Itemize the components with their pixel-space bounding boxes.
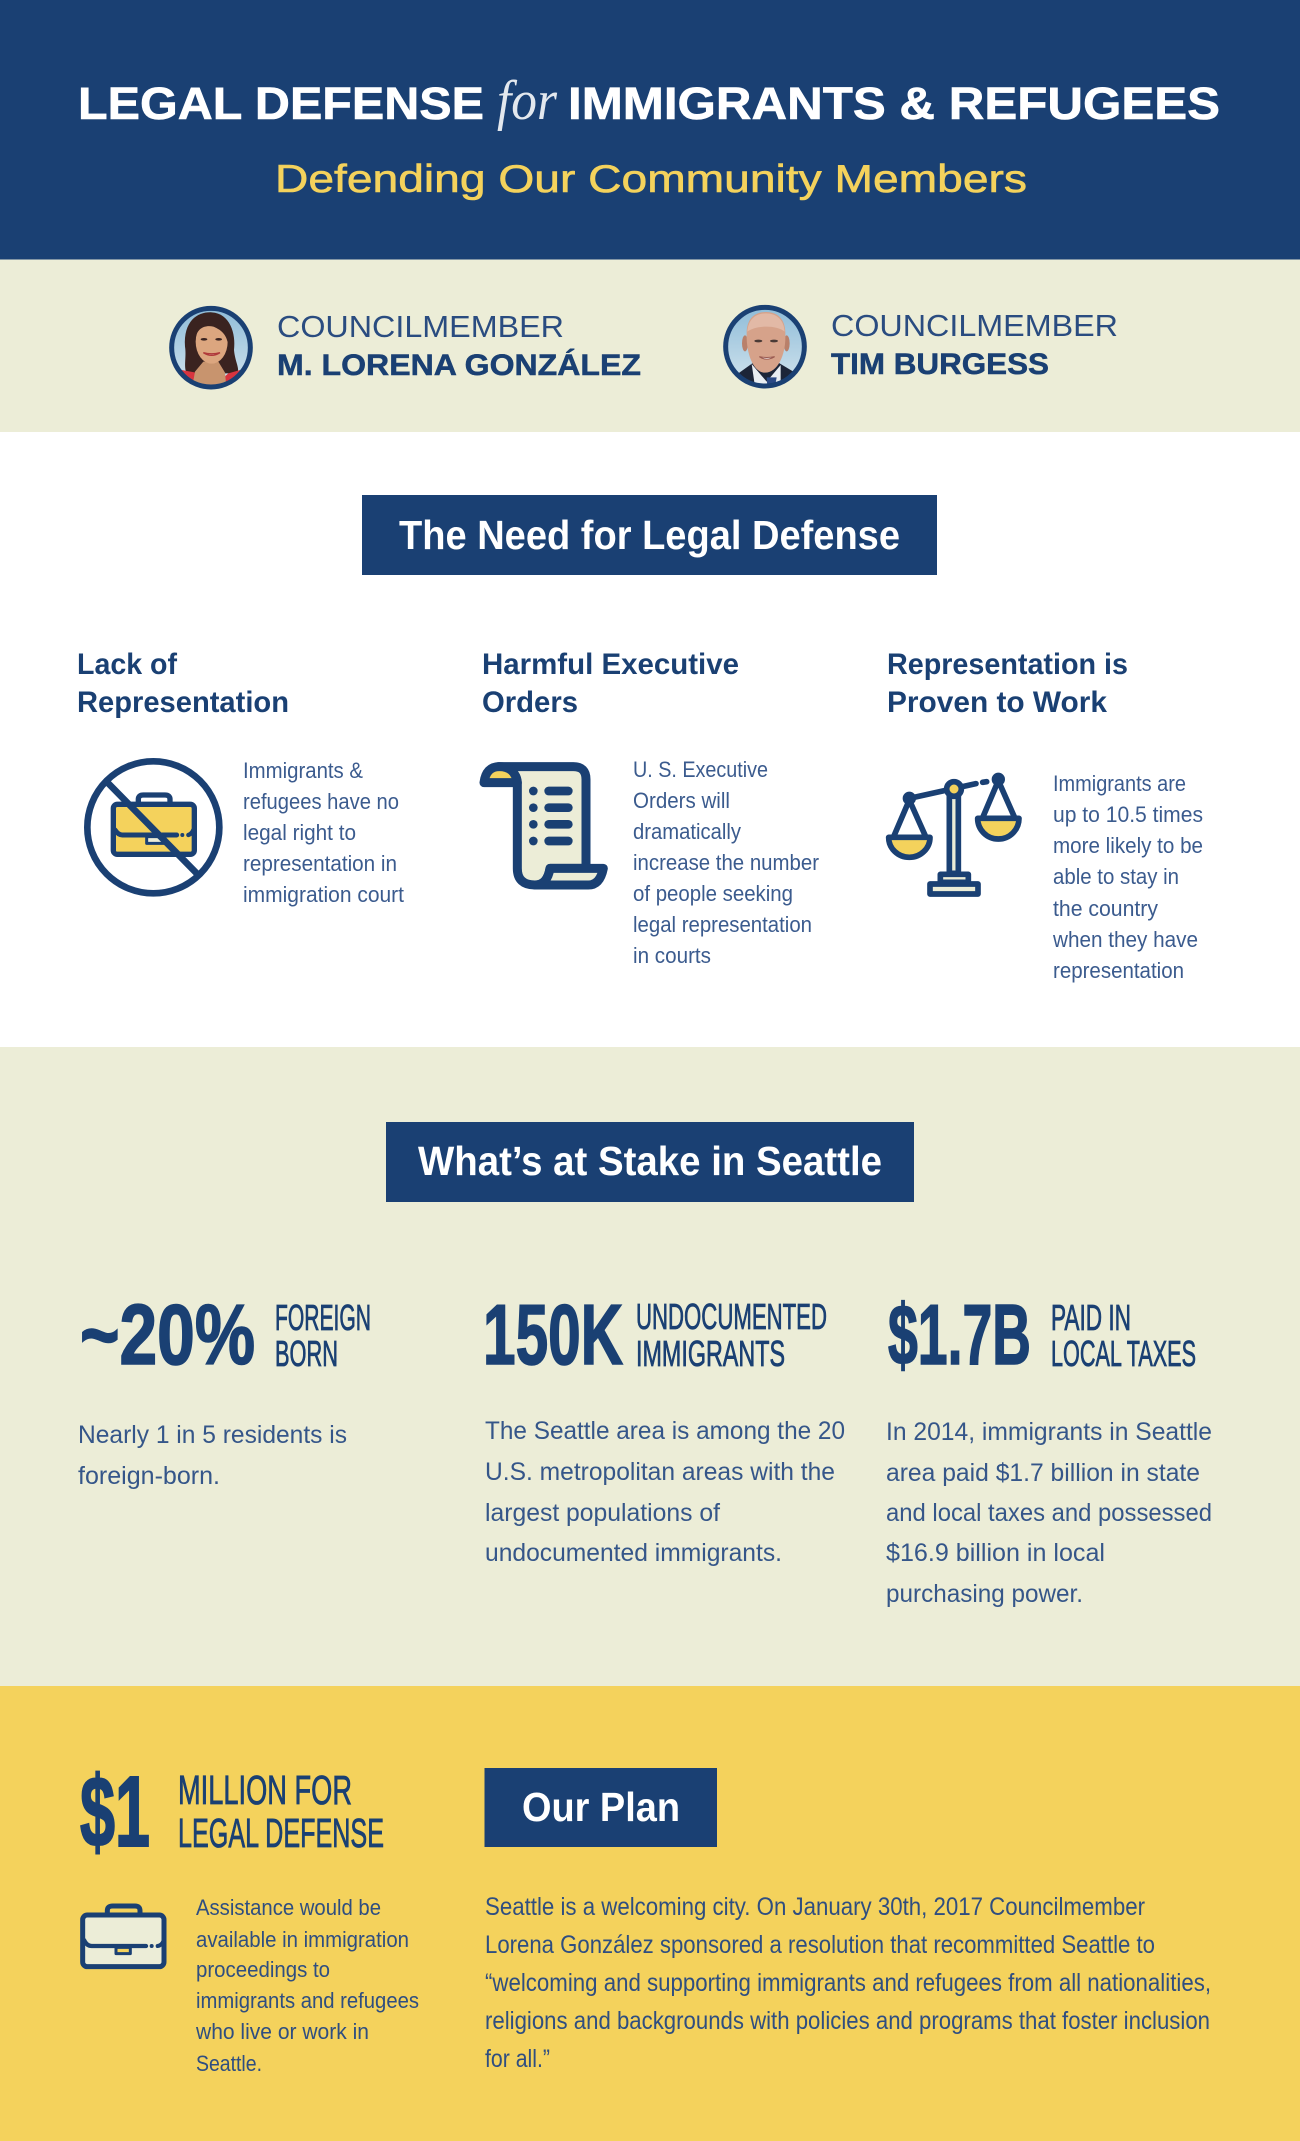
panel: header banner [0, 0, 1300, 260]
icon: crossed-out briefcase [87, 761, 219, 893]
text: lack of representation: immigration court [243, 882, 405, 907]
text: representation is proven to work: the country [1053, 896, 1159, 921]
subheading: lack of representation [77, 648, 289, 719]
text: representation is proven to work: Immigrants are [1053, 771, 1186, 796]
label: million for legal defense: LEGAL DEFENSE [178, 1810, 384, 1856]
icon: briefcase [83, 1906, 164, 1967]
text: representation is proven to work: representation [1053, 958, 1184, 983]
column: harmful executive orders [482, 648, 819, 968]
portrait: Tim Burgess [726, 307, 804, 390]
text: representation is proven to work [1052, 771, 1203, 983]
stat: undocumented immigrants [483, 1288, 845, 1567]
number: 150K: 150K [483, 1288, 623, 1383]
text: harmful executive orders: legal representation [633, 912, 812, 937]
label: foreign born: BORN [275, 1333, 338, 1374]
label: paid in local taxes: LOCAL TAXES [1051, 1333, 1196, 1374]
text: assistance: who live or work in [195, 2019, 369, 2044]
text: our plan: religions and backgrounds with policies and programs that foster inclusion [485, 2007, 1210, 2035]
panel: what's at stake in Seattle [0, 1047, 1300, 1686]
heading: what's at stake in Seattle: What’s at Stake in Seattle [418, 1138, 882, 1184]
label: undocumented immigrants [636, 1296, 827, 1374]
text: paid in local taxes: In 2014, immigrants in Seattle [886, 1418, 1212, 1446]
label: undocumented immigrants: UNDOCUMENTED [636, 1296, 827, 1337]
text: harmful executive orders: Orders will [633, 788, 730, 813]
subheading: representation is proven to work: Representation is [887, 648, 1128, 681]
text: lack of representation [243, 758, 405, 907]
text: our plan: “welcoming and supporting immigrants and refugees from all nationalities, [485, 1969, 1211, 1997]
subheading: representation is proven to work [887, 648, 1128, 719]
text: lack of representation: representation in [243, 851, 397, 876]
number: ~20%: ~20% [80, 1288, 255, 1383]
text: foreign born: foreign-born. [78, 1462, 220, 1490]
text: undocumented immigrants: The Seattle area is among the 20 [485, 1417, 845, 1445]
text: representation is proven to work: able to stay in [1053, 864, 1179, 889]
label: foreign born [275, 1297, 371, 1374]
title: IMMIGRANTS & REFUGEES [568, 78, 1220, 129]
subheading: lack of representation: Representation [77, 686, 289, 719]
label: undocumented immigrants: IMMIGRANTS [636, 1333, 785, 1374]
label: million for legal defense [178, 1767, 384, 1856]
title: for [497, 70, 557, 132]
text: representation is proven to work: up to 10.5 times [1053, 802, 1203, 827]
text: assistance: Seattle. [196, 2051, 262, 2076]
icon: scroll [484, 767, 603, 885]
subheading: lack of representation: Lack of [77, 648, 178, 681]
stat: foreign born [78, 1288, 371, 1490]
subheading: harmful executive orders: Orders [482, 686, 578, 719]
title: LEGAL DEFENSE [78, 78, 484, 129]
subheading: representation is proven to work: Proven to Work [887, 686, 1107, 719]
text: harmful executive orders: U. S. Executive [633, 757, 768, 782]
heading: what's at stake in Seattle [386, 1122, 914, 1202]
stat: paid in local taxes [886, 1288, 1212, 1608]
subtitle: Defending Our Community Members [275, 158, 1027, 201]
name: Lorena González: M. LORENA GONZÁLEZ [277, 348, 641, 382]
heading: our plan [484, 1768, 717, 1847]
number: $1.7B: $1.7B [888, 1288, 1031, 1383]
label: foreign born: FOREIGN [275, 1297, 371, 1338]
label: paid in local taxes [1051, 1297, 1196, 1374]
text: harmful executive orders [633, 757, 819, 968]
stat: $1 million [80, 1756, 384, 1868]
text: paid in local taxes: $16.9 billion in local [886, 1539, 1105, 1567]
panel: our plan [0, 1686, 1300, 2141]
text: lack of representation: legal right to [243, 820, 356, 845]
name: Lorena González: COUNCILMEMBER [277, 309, 564, 344]
panel: the need for legal defense [0, 432, 1300, 1047]
text: assistance: proceedings to [196, 1957, 330, 1982]
text: our plan: Lorena González sponsored a resolution that recommitted Seattle to [485, 1931, 1155, 1959]
subheading: harmful executive orders: Harmful Executive [482, 648, 739, 681]
heading: the need for legal defense [362, 495, 937, 575]
text: paid in local taxes [886, 1418, 1212, 1608]
text: undocumented immigrants [485, 1417, 845, 1567]
text: undocumented immigrants: undocumented immigrants. [485, 1539, 782, 1567]
name: Lorena González [277, 309, 641, 382]
name: Tim Burgess: COUNCILMEMBER [831, 308, 1118, 343]
text: representation is proven to work: when they have [1052, 927, 1198, 952]
text: harmful executive orders: in courts [633, 943, 711, 968]
text: paid in local taxes: and local taxes and possessed [886, 1499, 1212, 1527]
name: Tim Burgess [831, 308, 1118, 381]
panel: councilmembers [0, 260, 1300, 432]
subheading: harmful executive orders [482, 648, 739, 719]
text: undocumented immigrants: largest populations of [485, 1499, 720, 1527]
text: lack of representation: refugees have no [243, 789, 399, 814]
column: lack of representation [77, 648, 405, 907]
text: our plan: Seattle is a welcoming city. On January 30th, 2017 Councilmember [485, 1893, 1145, 1921]
number: $1: $1 [80, 1756, 150, 1868]
text: lack of representation: Immigrants & [243, 758, 363, 783]
text: harmful executive orders: increase the number [633, 850, 819, 875]
text: foreign born [78, 1421, 347, 1490]
text: assistance: Assistance would be [196, 1895, 381, 1920]
text: representation is proven to work: more likely to be [1053, 833, 1203, 858]
text: foreign born: Nearly 1 in 5 residents is [78, 1421, 347, 1449]
label: million for legal defense: MILLION FOR [178, 1767, 352, 1813]
title [78, 70, 1220, 132]
text: assistance: available in immigration [196, 1927, 409, 1952]
text: harmful executive orders: of people seeking [633, 881, 793, 906]
text: paid in local taxes: area paid $1.7 billion in state [886, 1459, 1200, 1487]
text: our plan [485, 1893, 1211, 2073]
text: assistance [195, 1895, 419, 2076]
text: our plan: for all.” [485, 2045, 550, 2073]
text: paid in local taxes: purchasing power. [886, 1580, 1083, 1608]
name: Tim Burgess: TIM BURGESS [831, 348, 1049, 381]
text: assistance: immigrants and refugees [196, 1988, 419, 2013]
text: harmful executive orders: dramatically [633, 819, 742, 844]
portrait: Lorena González [172, 308, 250, 390]
heading: our plan: Our Plan [522, 1784, 680, 1830]
heading: the need for legal defense: The Need for Legal Defense [399, 512, 900, 558]
column: representation is proven to work [887, 648, 1203, 983]
text: undocumented immigrants: U.S. metropolitan areas with the [485, 1458, 835, 1486]
icon: scales of justice [889, 776, 1019, 894]
label: paid in local taxes: PAID IN [1051, 1297, 1131, 1338]
